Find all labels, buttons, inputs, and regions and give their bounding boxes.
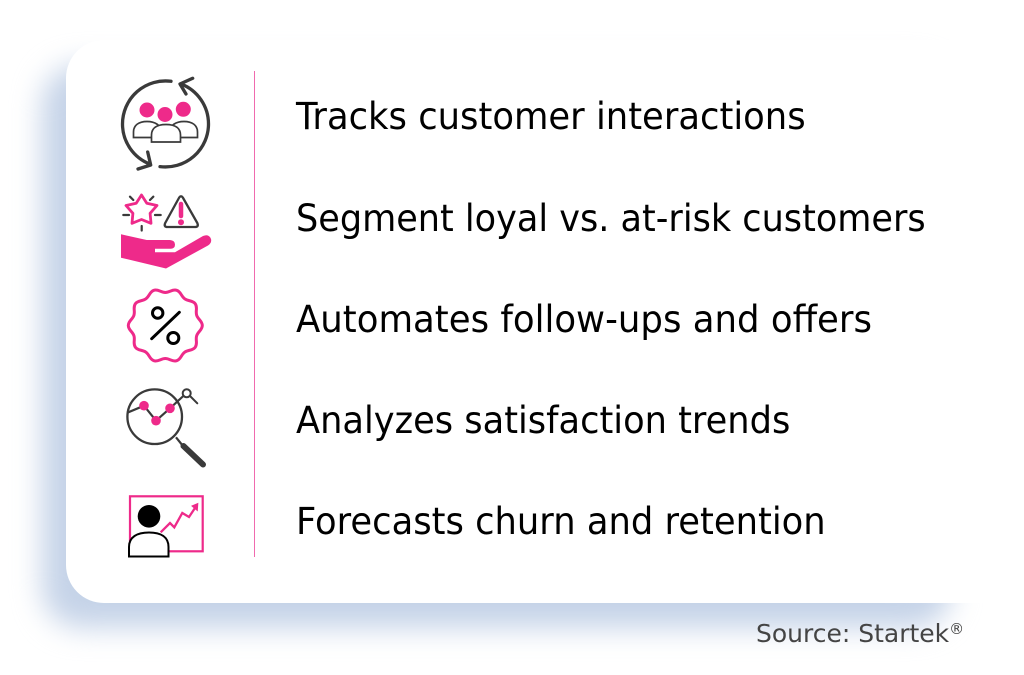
icon: percent badge — [128, 290, 202, 361]
white card panel — [66, 40, 986, 603]
text: segment customers: Segment loyal vs. at-risk customers — [296, 196, 925, 240]
source credit: Source: Startek® — [756, 619, 964, 648]
icon: star and warning over hand — [121, 195, 211, 268]
text: analyzes satisfaction: Analyzes satisfaction trends — [296, 398, 790, 442]
icon: customers in cycle — [122, 78, 208, 169]
text: automates follow-ups: Automates follow-ups and offers — [296, 297, 872, 341]
text: tracks customer interactions: Tracks customer interactions — [296, 94, 805, 138]
icon: magnifier over trend line — [127, 389, 203, 464]
card shadow — [42, 65, 952, 628]
text: forecasts churn: Forecasts churn and retention — [296, 499, 825, 543]
vertical divider — [254, 71, 255, 557]
icon: presenter with growth chart — [129, 496, 203, 556]
